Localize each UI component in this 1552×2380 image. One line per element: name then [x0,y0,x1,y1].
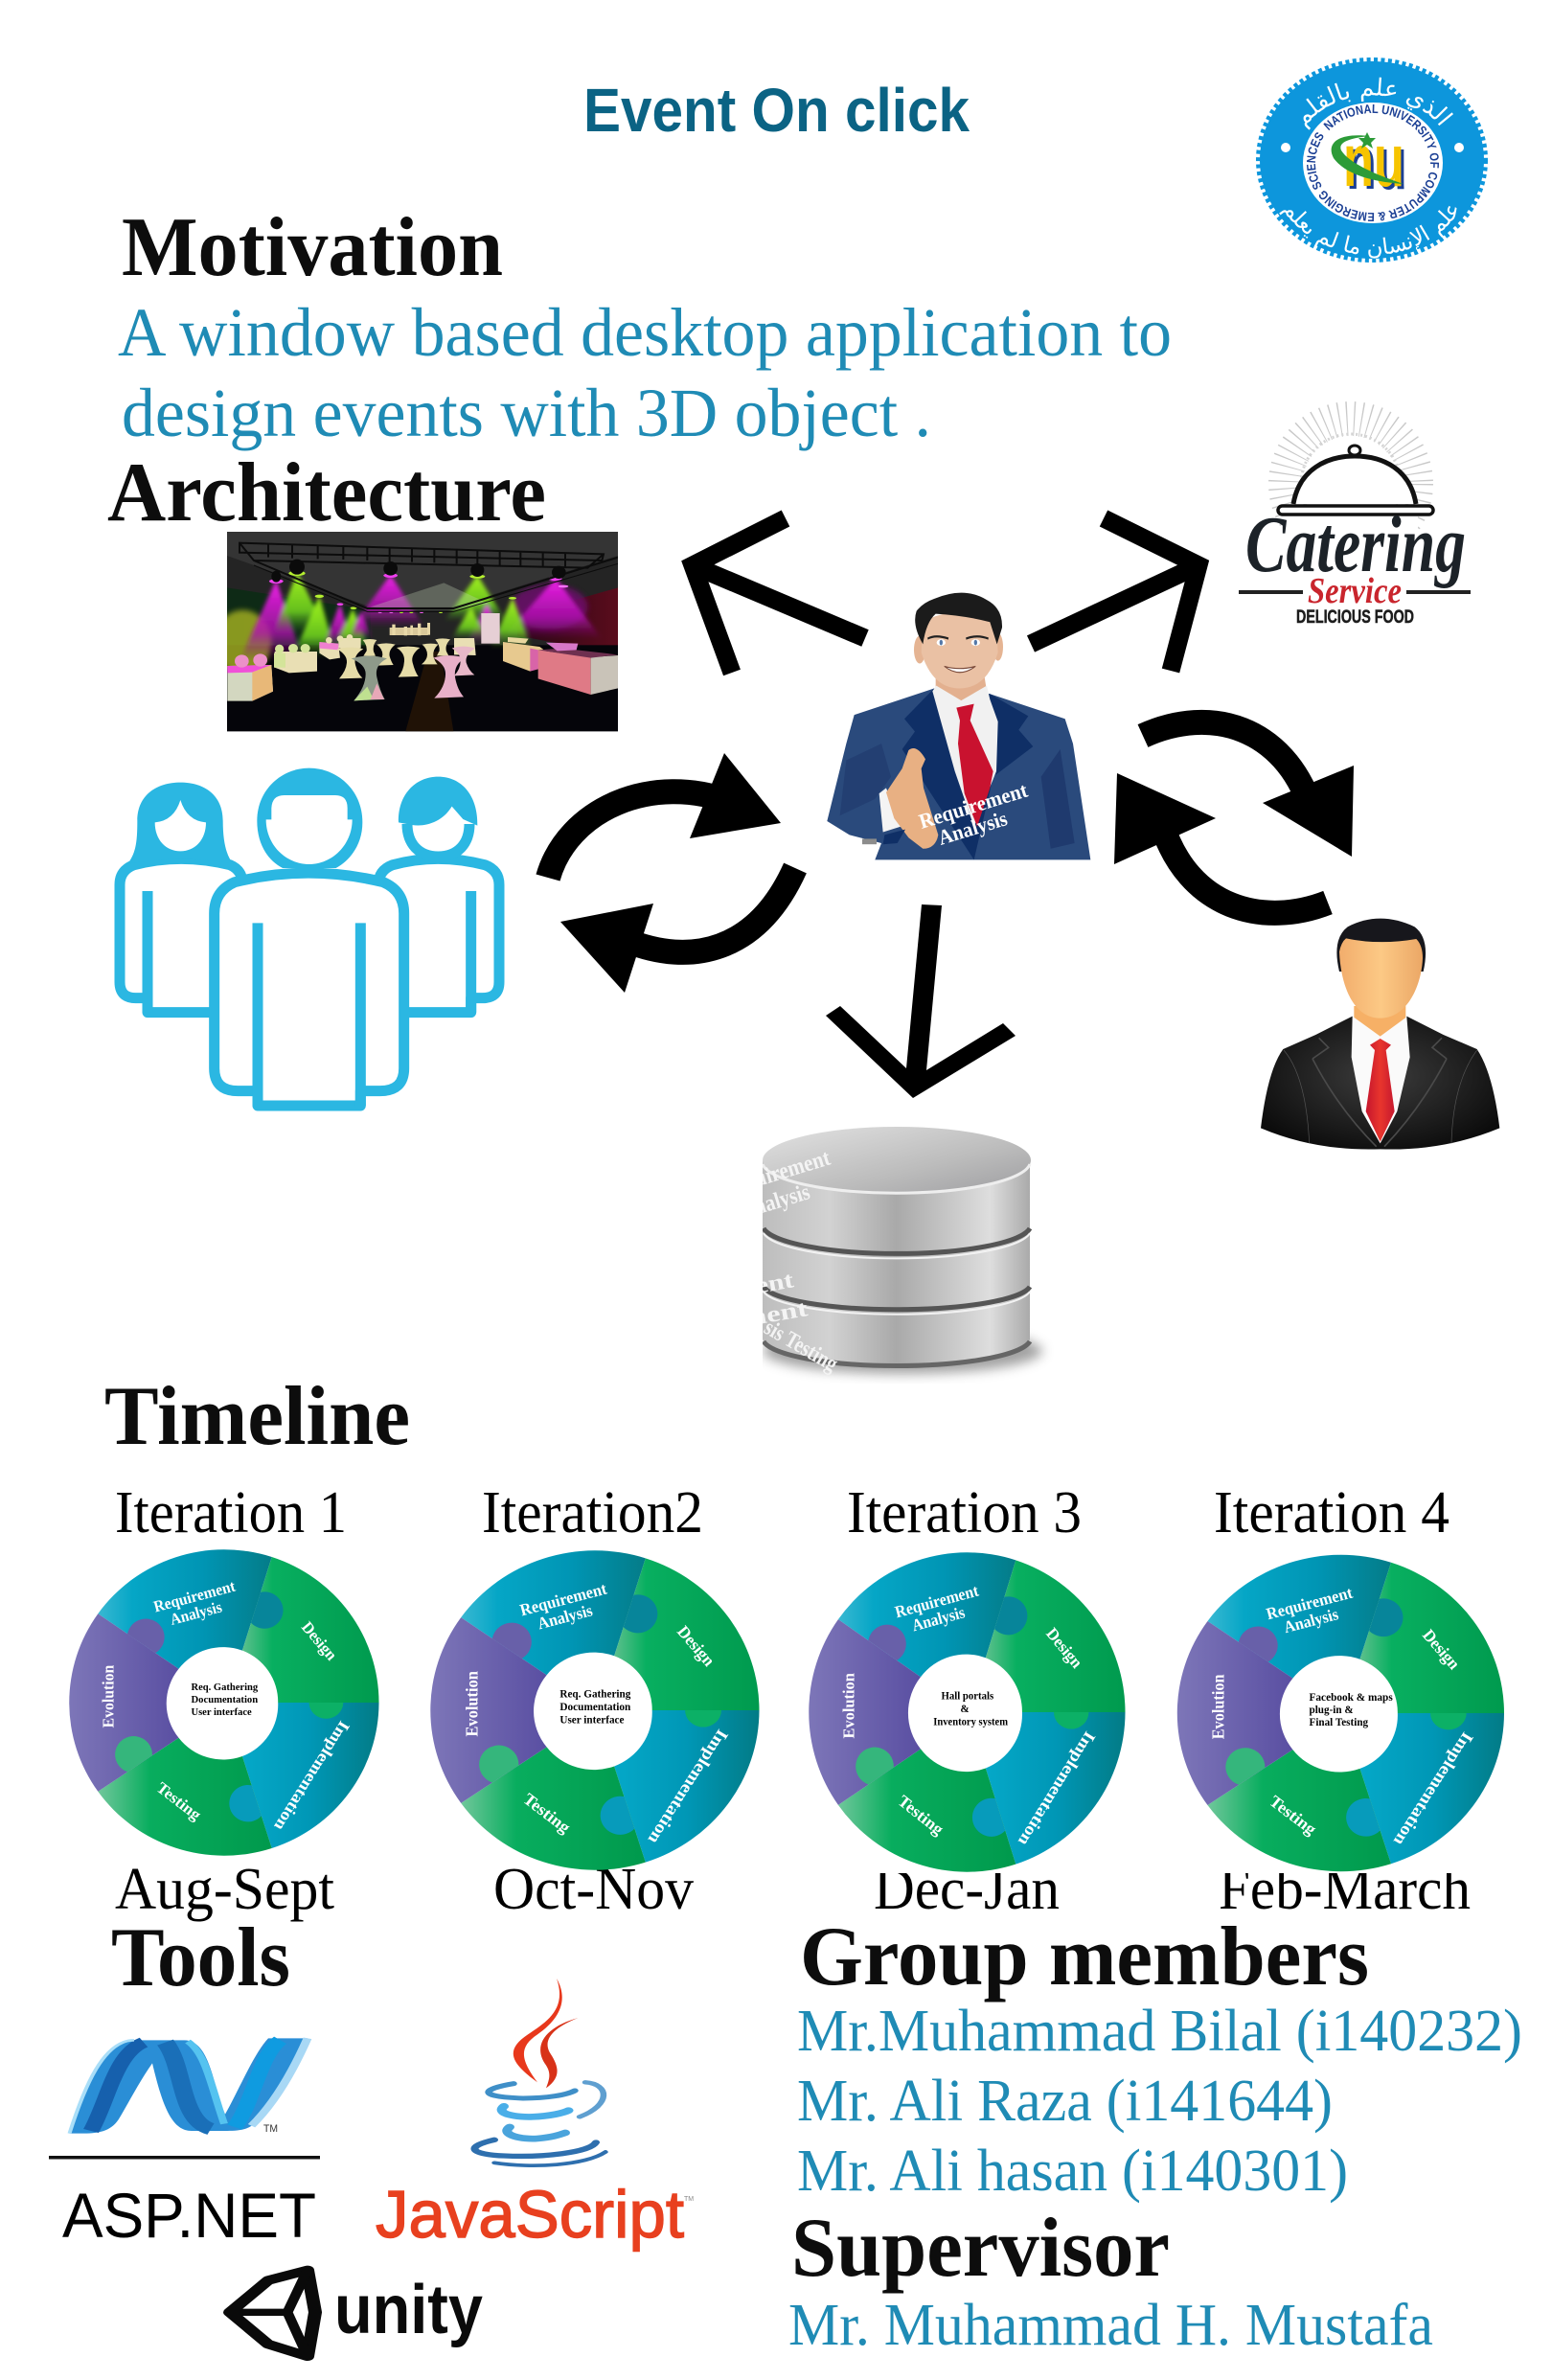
logo: ASP.NET [49,2038,320,2251]
wheel: iteration 3: Hall portals [942,1691,994,1703]
label: requirement analysis on suit: Analysis [935,806,1011,850]
wheel: iteration 2 [430,1550,759,1870]
wheel: iteration 3: Analysis [910,1602,967,1635]
wheel: iteration 2: Req. Gathering [559,1689,631,1701]
wheel: iteration 4: Implementation [1390,1729,1477,1849]
logo: unity: unity [334,2272,483,2348]
logo: ASP.NET: ASP.NET [62,2180,316,2251]
icon: catering service logo: Service [1308,571,1402,611]
date labels: Feb-March [1219,1857,1471,1922]
icon: database cylinder: sis Testing [760,1316,842,1377]
wheel: iteration 4 [1177,1555,1504,1871]
heading: Architecture: Architecture [107,446,546,539]
wheel: iteration 4: Design [1419,1626,1464,1673]
logo: ASP.NET: TM [263,2123,278,2135]
title: Event On click [583,76,970,145]
icon: team of three people [120,768,499,1106]
illustration: client in dark suit [1261,919,1499,1150]
heading: Group members: Group members [800,1911,1369,2003]
wheel: iteration 1: Design [298,1618,341,1664]
wheel: iteration 1: Req. Gathering [191,1682,259,1693]
icon: university logo: NATIONAL UNIVERSITY OF COMPUTER & EMERGING SCIENCES [1307,104,1439,221]
wheel: iteration 2: Analysis [536,1601,595,1633]
wheel: iteration 3: & [960,1704,970,1715]
wheel: iteration 3: Requirement [893,1581,981,1621]
icon: catering service logo: Catering [1245,500,1466,589]
text block: motivation description [118,294,1172,451]
iteration labels: Iteration 4 [1214,1480,1449,1545]
text: supervisor name: Mr. Muhammad H. Mustafa [788,2293,1433,2358]
icon: university logo: علم الإنسان ما لم يعلم [1279,205,1456,259]
icon: university logo: الذي علم بالقلم [1303,77,1453,130]
wheel: iteration 3: Testing [895,1791,947,1839]
wheel: iteration 2: Testing [519,1790,575,1837]
wheel: iteration 3: Design [1042,1624,1086,1672]
wheel: iteration 4: Evolution [1208,1674,1228,1739]
label: requirement analysis on suit: Requirement [916,777,1031,834]
wheel: iteration 3: Evolution [839,1673,857,1739]
illustration: businessman offering handshake [827,593,1090,859]
heading: Tools: Tools [111,1911,290,2004]
icon: catering service logo: DELICIOUS FOOD [1296,607,1414,628]
date labels: Aug-Sept [115,1857,334,1922]
wheel: iteration 1: Testing [153,1778,205,1824]
wheel: iteration 4: Analysis [1282,1604,1340,1636]
wheel: iteration 2: User interface [559,1714,624,1726]
date labels: Oct-Nov [493,1857,694,1922]
wheel: iteration 4: plug-in & [1310,1705,1354,1716]
iteration labels [115,1480,1449,1545]
text block: member names: Mr.Muhammad Bilal (i140232) [797,1999,1522,2064]
wheel: iteration 1: User interface [191,1706,252,1718]
wheel: iteration 2: Evolution [462,1671,481,1737]
wheel: iteration 4: Final Testing [1310,1717,1368,1728]
logo: JavaScript coffee cup: TM [684,2196,694,2203]
icon: database cylinder [763,1127,1048,1382]
date labels [115,1857,1471,1922]
wheel: iteration 1: Evolution [99,1664,118,1728]
wheel: iteration 3: Implementation [1015,1728,1100,1850]
arrows: refresh loop left [548,753,795,993]
text block: motivation description: A window based desktop application to [118,294,1172,371]
arrows: refresh loop right [1114,722,1354,913]
arrow: to event scene [693,518,865,673]
iteration labels: Iteration 1 [115,1480,347,1545]
icon: database cylinder: Analysis [738,1179,813,1224]
wheel: iteration 4: Testing [1266,1792,1320,1839]
wheel: iteration 4: Facebook & maps [1310,1692,1393,1704]
wheel: iteration 1: Requirement [151,1577,238,1615]
icon: database cylinder: ment [740,1296,810,1333]
arrow: to catering [1031,518,1198,671]
text block: member names: Mr. Ali Raza (i141644) [797,2069,1333,2134]
iteration labels: Iteration2 [482,1480,703,1545]
logo: unity [230,2270,483,2356]
date labels: Dec-Jan [874,1857,1060,1922]
text block: motivation description: design events with 3D object . [122,375,931,451]
wheel: iteration 2: Documentation [559,1702,631,1713]
icon: database cylinder: ent [754,1268,795,1299]
icon: catering service logo [1239,419,1471,628]
icon: university logo: nu [1343,118,1404,202]
wheel: iteration 3: Inventory system [933,1716,1009,1728]
date label top clip mask [862,1861,1495,1873]
wheel: iteration 1: Implementation [270,1718,354,1835]
photo: event stage scene [214,532,618,731]
logo: JavaScript coffee cup: JavaScript [376,2177,684,2252]
heading: Supervisor: Supervisor [791,2202,1170,2295]
iteration labels: Iteration 3 [847,1480,1082,1545]
icon: university logo [1256,57,1488,263]
wheel: iteration 2: Implementation [645,1727,733,1847]
wheel: iteration 4: Requirement [1264,1583,1355,1623]
logo: JavaScript coffee cup [376,1979,694,2252]
icon: university logo: nu [1346,121,1407,205]
wheel: iteration 3 [809,1552,1125,1872]
icon: database cylinder: Requirement [719,1146,833,1202]
wheel: iteration 2: Requirement [517,1579,609,1619]
wheel: iteration 2: Design [673,1622,719,1670]
wheel: iteration 1: Documentation [191,1694,258,1705]
wheel: iteration 1 [69,1549,379,1856]
heading: Timeline: Timeline [104,1370,410,1463]
wheel: iteration 1: Analysis [168,1597,224,1629]
arrow: to database [826,904,1016,1098]
heading: Motivation: Motivation [122,201,503,294]
text block: member names [797,1999,1522,2204]
text block: member names: Mr. Ali hasan (i140301) [797,2139,1348,2204]
